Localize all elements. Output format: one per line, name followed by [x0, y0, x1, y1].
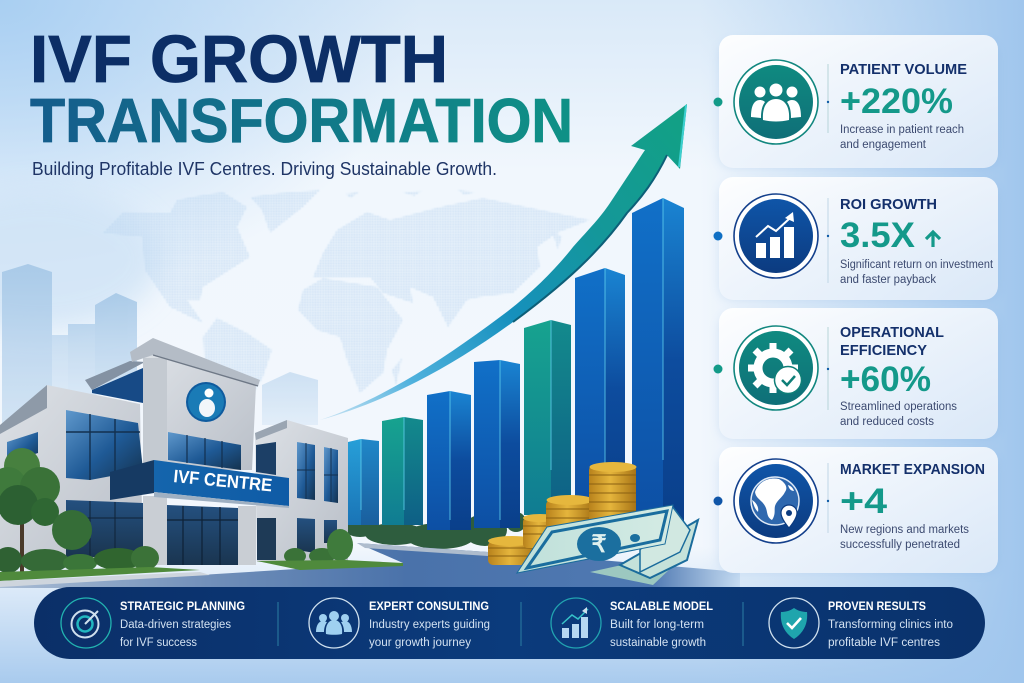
city skyline [2, 264, 318, 430]
panel: market expansion [714, 447, 998, 573]
panel: ROI growth [714, 177, 998, 300]
right wing [255, 420, 348, 562]
item: strategic planning: Data-driven strategies [120, 619, 231, 631]
panel: operational efficiency: EFFICIENCY [840, 342, 927, 359]
panel: patient volume: and engagement [840, 139, 927, 151]
item: strategic planning: for IVF success [120, 637, 197, 649]
item: proven results: PROVEN RESULTS [828, 601, 926, 613]
bar chart: growth columns [348, 198, 684, 530]
title: TRANSFORMATION [30, 87, 573, 156]
panel: market expansion: New regions and markets [840, 524, 969, 536]
item: expert consulting [309, 598, 490, 649]
tower [143, 355, 256, 470]
panel: market expansion: +4 [840, 482, 888, 521]
panel: patient volume: +220% [840, 82, 953, 121]
world map [103, 190, 590, 400]
building: IVF centre [0, 338, 348, 565]
canopy [110, 460, 154, 500]
panel: ROI growth: 3.5X [840, 216, 916, 255]
title [30, 22, 573, 156]
icon: globe with pin [751, 477, 799, 528]
item: expert consulting: your growth journey [369, 637, 471, 649]
upper dark block [92, 368, 143, 403]
panel: operational efficiency: and reduced costs [840, 416, 934, 428]
icon: patient group [751, 84, 801, 122]
subtitle: Building Profitable IVF Centres. Driving Sustainable Growth. [32, 158, 497, 179]
icon: rising bars [756, 212, 794, 258]
item: scalable model [551, 598, 713, 649]
panel: patient volume: PATIENT VOLUME [840, 61, 967, 78]
panel: ROI growth: Significant return on investment [840, 259, 994, 271]
sign label: IVF CENTRE [173, 466, 273, 495]
panel: operational efficiency [714, 308, 998, 439]
item: strategic planning [61, 598, 245, 649]
item: expert consulting: Industry experts guiding [369, 619, 490, 631]
clinic logo [186, 382, 226, 422]
item: scalable model: SCALABLE MODEL [610, 601, 713, 613]
cash: rupee notes [517, 505, 698, 585]
panel: patient volume: Increase in patient reach [840, 124, 964, 136]
trees and lawn [0, 448, 403, 587]
panel: market expansion: successfully penetrated [840, 539, 960, 551]
tower windows [168, 432, 241, 470]
growth arrow [320, 104, 687, 420]
tree line behind bars [342, 512, 526, 549]
coins [488, 462, 636, 565]
item: scalable model: Built for long-term [610, 619, 704, 631]
item: proven results: profitable IVF centres [828, 637, 940, 649]
item: scalable model: sustainable growth [610, 637, 706, 649]
icon: gear with check [748, 343, 802, 394]
panel: operational efficiency: OPERATIONAL [840, 324, 944, 341]
item: proven results: Transforming clinics into [828, 619, 953, 631]
panel: market expansion: MARKET EXPANSION [840, 461, 985, 478]
columns and doors [143, 496, 167, 565]
left wing [0, 385, 143, 565]
road and pavement [0, 543, 740, 588]
panel: patient volume [714, 35, 998, 168]
cash: rupee notes: ₹ [591, 531, 607, 558]
panel: operational efficiency: Streamlined operations [840, 401, 957, 413]
panel: ROI growth: ROI GROWTH [840, 196, 937, 213]
item: proven results [769, 598, 953, 649]
item: expert consulting: EXPERT CONSULTING [369, 601, 489, 613]
bottom banner [34, 587, 985, 659]
panel: operational efficiency: +60% [840, 360, 931, 399]
item: strategic planning: STRATEGIC PLANNING [120, 601, 245, 613]
title: IVF GROWTH [30, 22, 448, 97]
panel: ROI growth: and faster payback [840, 274, 936, 286]
